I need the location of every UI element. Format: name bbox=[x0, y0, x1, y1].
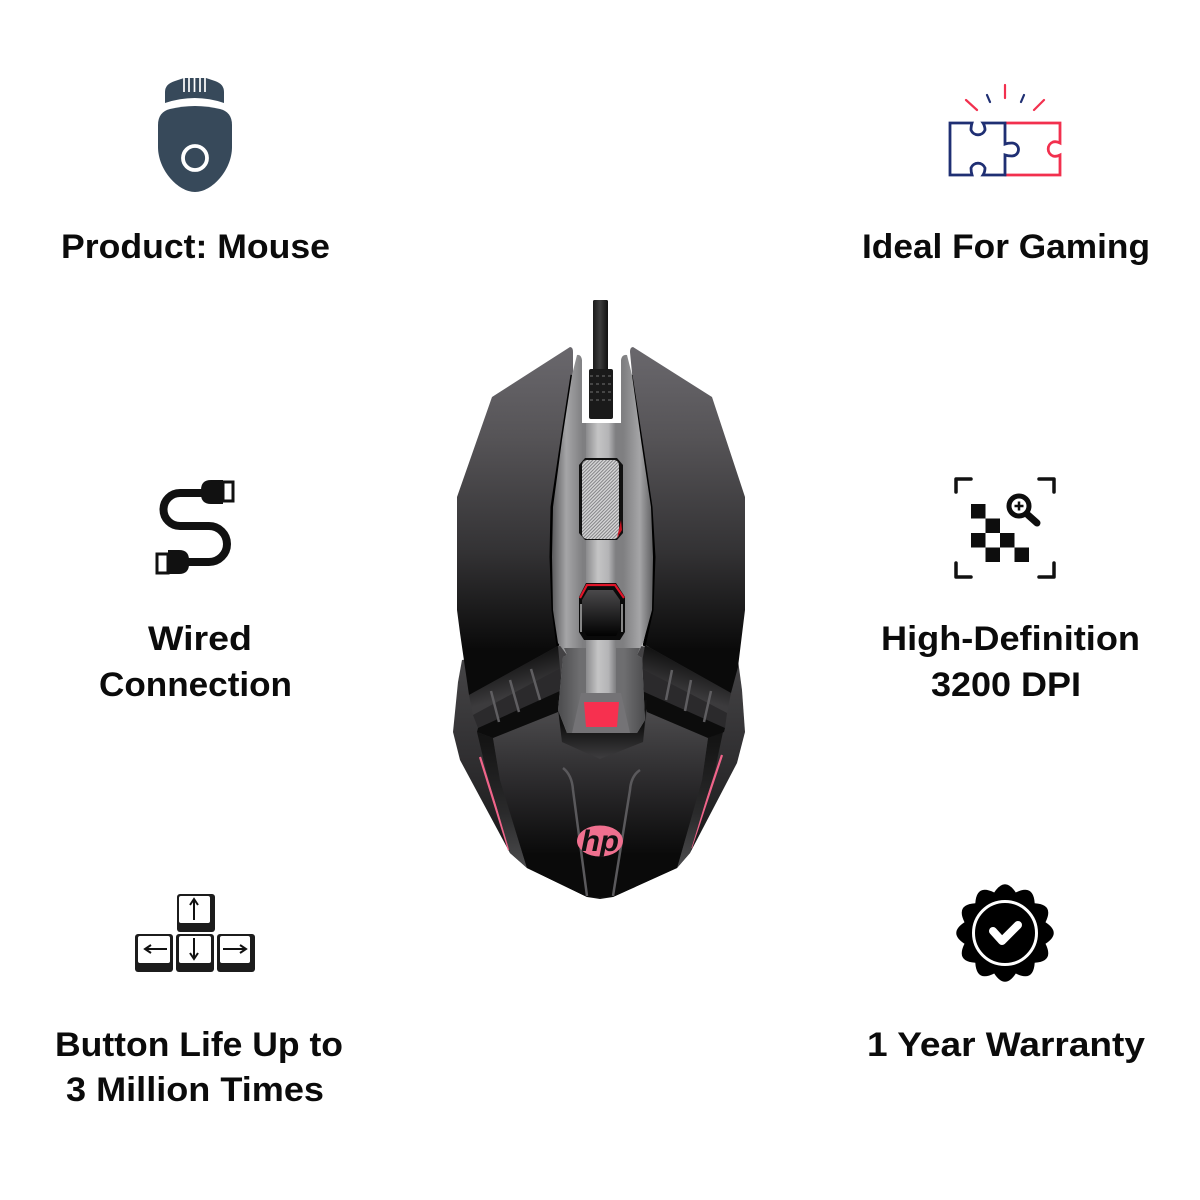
right top panel bbox=[630, 347, 745, 693]
icon: mouse product bbox=[158, 77, 232, 192]
product image: gaming mouse bbox=[453, 300, 745, 899]
heading: 1 Year Warranty: 1 Year Warranty bbox=[867, 1026, 1145, 1064]
heading: High-Definition 3200 DPI bbox=[881, 620, 1140, 704]
heading: Wired Connection bbox=[99, 620, 292, 704]
icon: high definition pixels with magnifier bbox=[956, 479, 1054, 577]
right wing vents bbox=[640, 645, 731, 738]
icon: cable bbox=[157, 480, 233, 574]
heading: High-Definition 3200 DPI: High-Definition bbox=[881, 620, 1140, 658]
scroll socket around dock bbox=[557, 700, 647, 759]
centre light strip bbox=[586, 423, 616, 698]
dpi button bbox=[579, 583, 625, 640]
heading: Wired Connection: Connection bbox=[99, 666, 292, 704]
white cable slot bbox=[583, 370, 620, 423]
silver centre spine bbox=[552, 355, 653, 733]
lower centre plate bbox=[493, 710, 708, 897]
lower body shell bbox=[453, 640, 745, 899]
cable bbox=[589, 300, 613, 419]
red button light bbox=[572, 693, 630, 733]
heading: Button Life bbox=[55, 1026, 343, 1109]
black seam lines bbox=[551, 375, 654, 646]
scroll wheel bbox=[579, 458, 623, 540]
icon: warranty badge bbox=[956, 884, 1054, 982]
icon: puzzle pieces bbox=[950, 85, 1060, 175]
lower side bands bbox=[477, 732, 723, 868]
heading: Button Life: 3 Million Times bbox=[66, 1071, 324, 1109]
pink side lights bbox=[480, 755, 722, 850]
front grooves bbox=[563, 768, 640, 896]
left top panel bbox=[457, 347, 573, 695]
hp logo: hp bbox=[581, 825, 619, 858]
heading: High-Definition 3200 DPI: 3200 DPI bbox=[931, 666, 1081, 704]
icon: arrow keys bbox=[135, 894, 255, 972]
heading: Product: Mouse: Product: Mouse bbox=[61, 228, 330, 266]
heading: Button Life: Button Life Up to bbox=[55, 1026, 343, 1064]
infographic canvas bbox=[57, 78, 1148, 1102]
lower spine housing bbox=[558, 648, 645, 733]
heading: Ideal For Gaming: Ideal For Gaming bbox=[862, 228, 1150, 266]
left wing vents bbox=[469, 646, 562, 738]
heading: Wired Connection: Wired bbox=[148, 620, 252, 658]
